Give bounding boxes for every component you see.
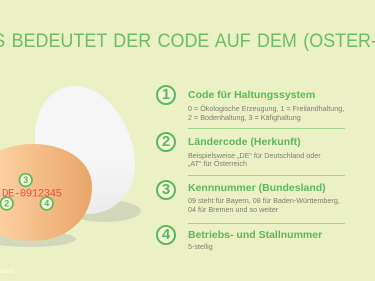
text 2	[188, 151, 321, 168]
illustration: eggs	[0, 86, 141, 247]
number 4	[156, 225, 176, 245]
text 1: 0 = Ökologische Erzeugung, 1 = Freilandhaltung,	[188, 104, 344, 113]
number 2	[156, 132, 176, 152]
marker 4: 4	[44, 199, 49, 209]
heading 3: Kennnummer (Bundesland)	[188, 182, 326, 194]
marker 3	[19, 174, 32, 186]
number 2: 2	[162, 133, 170, 150]
number 4: 4	[162, 226, 170, 243]
text 1: 2 = Bodenhaltung, 3 = Käfighaltung	[188, 113, 301, 122]
text 3: 04 für Bremen und so weiter	[188, 205, 278, 214]
heading 4: Betriebs- und Stallnummer	[188, 229, 322, 241]
text 2: „AT“ für Österreich	[188, 159, 247, 168]
heading 1: Code für Haltungssystem	[188, 88, 315, 100]
shadow: orange egg	[0, 231, 76, 247]
number 1	[156, 85, 176, 105]
number 1: 1	[162, 86, 170, 103]
white egg	[35, 86, 135, 214]
text 4: 5-stellig	[188, 242, 213, 251]
orange egg	[0, 144, 92, 241]
marker 3: 3	[23, 175, 28, 185]
text 3	[188, 196, 340, 214]
shadow: white egg	[69, 200, 141, 222]
text 3: 09 steht für Bayern, 08 für Baden-Württemberg,	[188, 196, 340, 205]
number 3: 3	[162, 180, 170, 198]
text 2: Beispielsweise „DE“ für Deutschland oder	[188, 151, 321, 160]
marker 2	[0, 197, 13, 210]
marker 2: 2	[4, 199, 9, 209]
egg code: DE-0912345	[2, 188, 62, 200]
marker 4	[40, 197, 53, 210]
text 1	[188, 104, 344, 122]
heading 2: Ländercode (Herkunft)	[188, 136, 301, 148]
number 3	[156, 180, 176, 200]
